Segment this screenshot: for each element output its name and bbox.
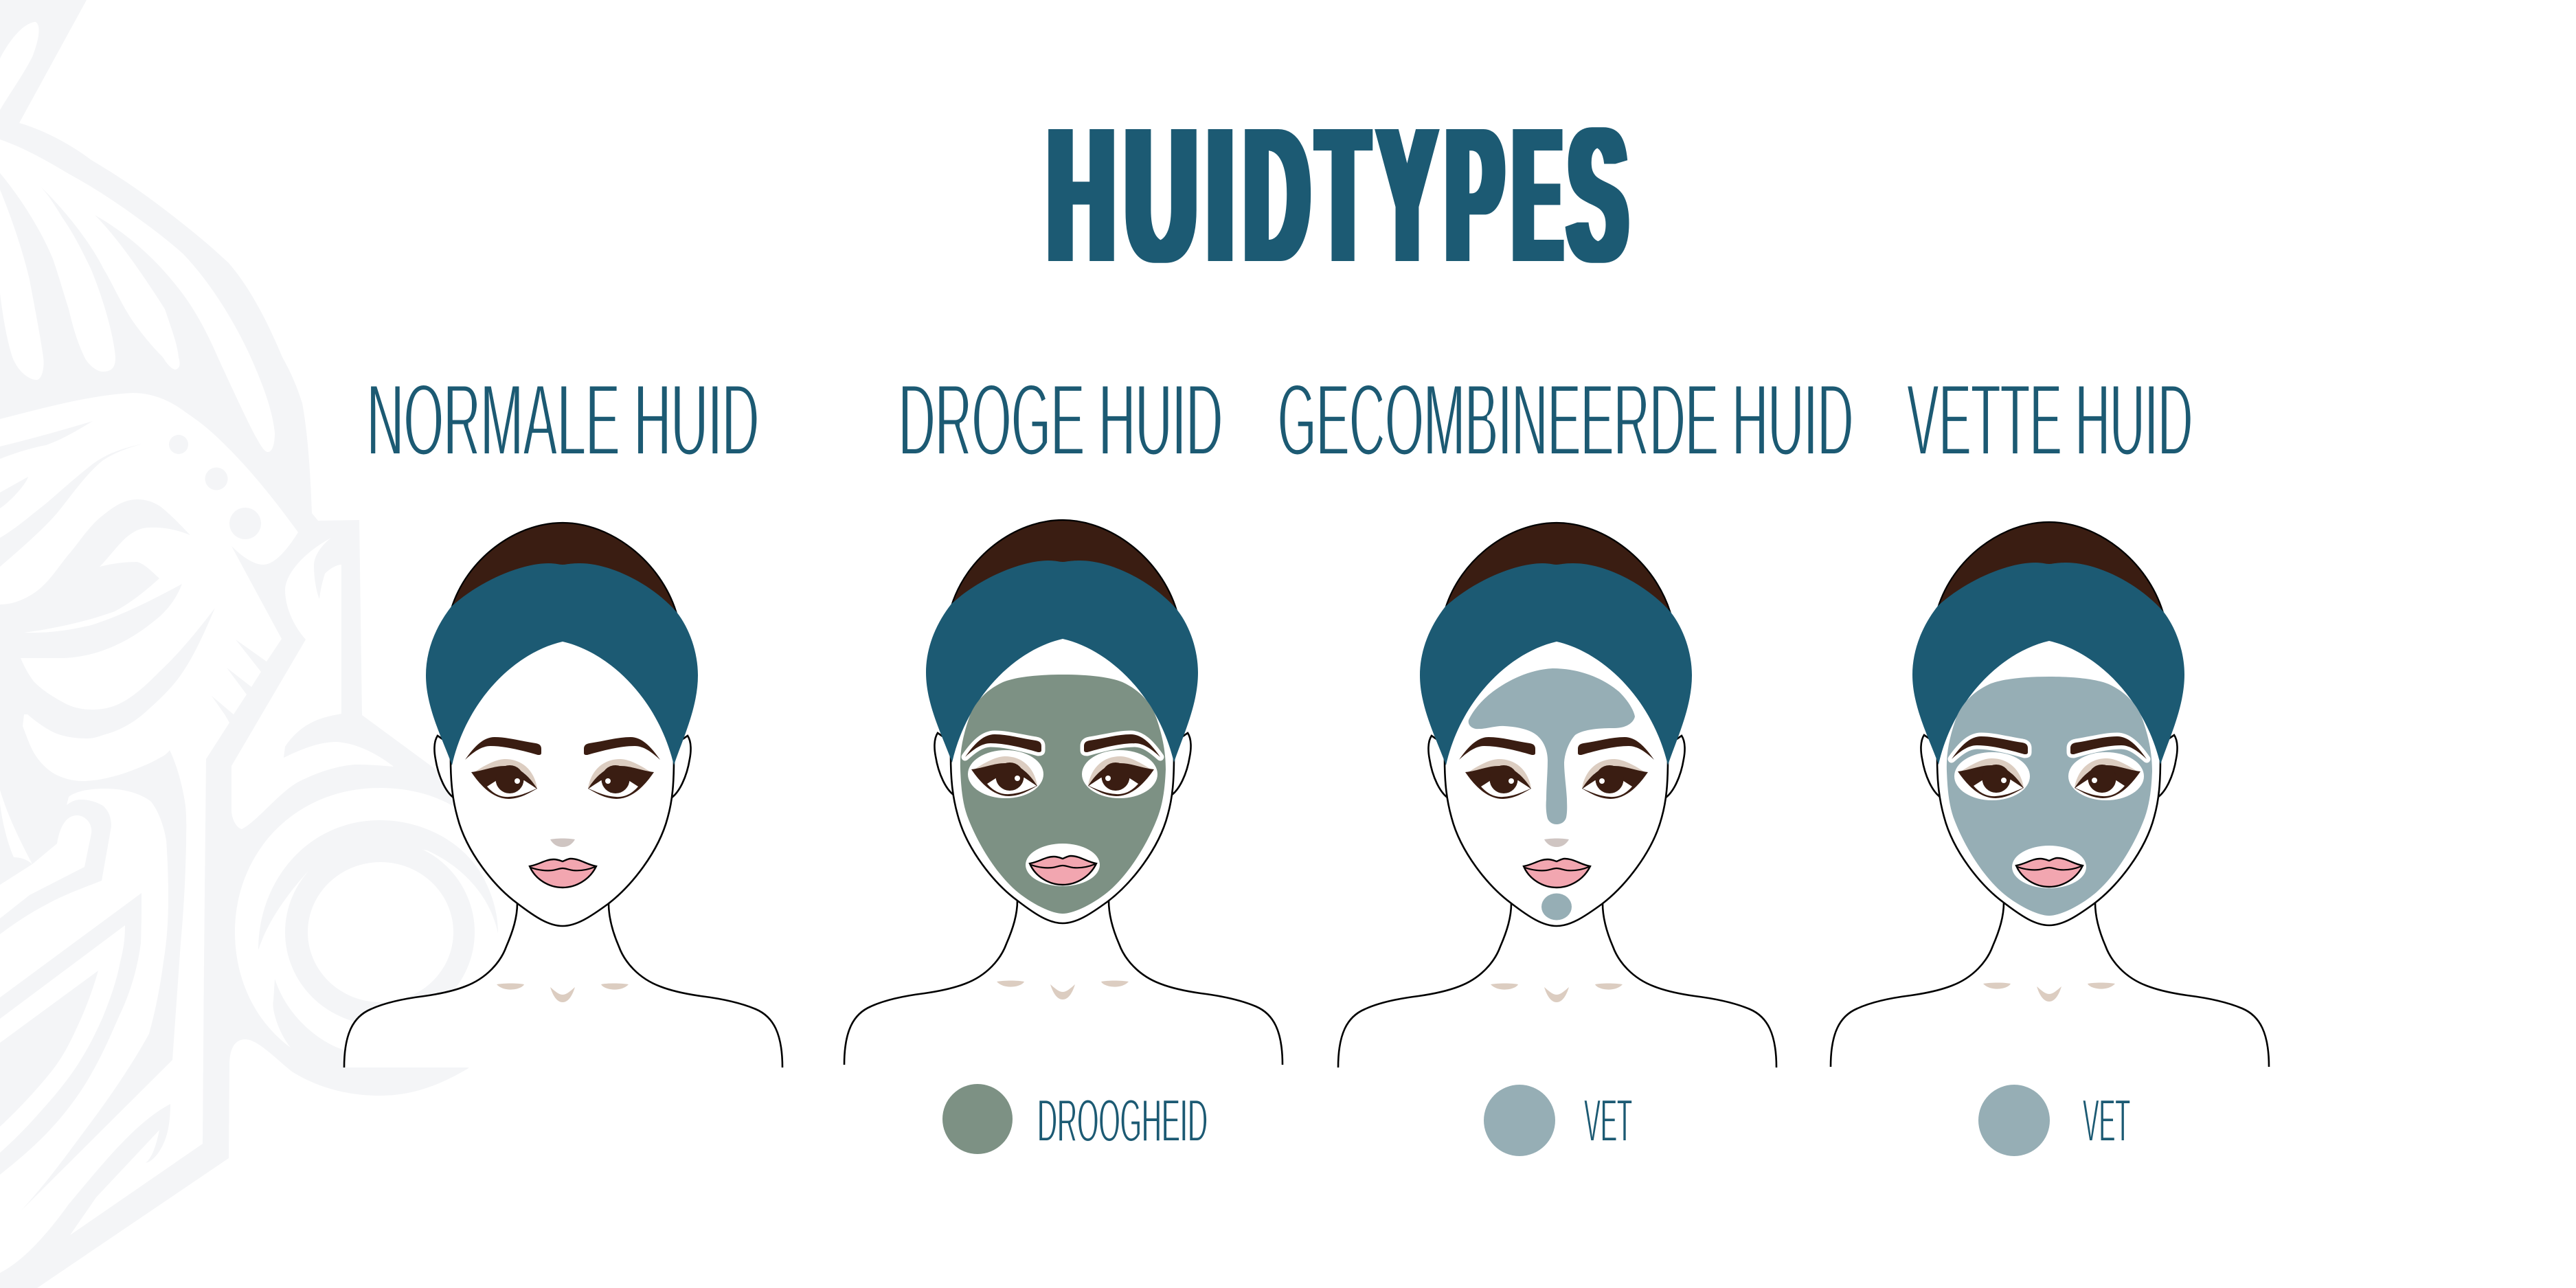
title: E: [1513, 87, 1561, 302]
text: VET: [1584, 1087, 1632, 1154]
title: P: [1446, 88, 1503, 302]
face: normale huid: [344, 523, 782, 1067]
title: D: [1245, 89, 1309, 302]
title: I: [1208, 87, 1233, 302]
title: T: [1318, 89, 1368, 302]
legend: droogheid: [942, 1084, 1208, 1154]
text: DROGE HUID: [899, 363, 1223, 477]
title: [1048, 87, 1627, 302]
legend: vet (gecombineerd): [1484, 1085, 1632, 1156]
title: U: [1125, 89, 1197, 302]
title: Y: [1379, 88, 1436, 302]
title: H: [1048, 89, 1115, 302]
text: VETTE HUID: [1907, 363, 2193, 477]
text: NORMALE HUID: [367, 363, 759, 477]
chin oil spot: [1541, 893, 1572, 920]
T-zone oil area: [1469, 668, 1635, 824]
background tribal lion pattern: [0, 0, 536, 1288]
face: vette huid with oil mask: [1831, 522, 2269, 1067]
title: S: [1568, 88, 1627, 302]
text: GECOMBINEERDE HUID: [1278, 363, 1853, 477]
text: VET: [2083, 1087, 2130, 1154]
face: droge huid with dryness mask: [844, 520, 1283, 1065]
face: gecombineerde huid with T-zone: [1338, 523, 1776, 1067]
text: DROOGHEID: [1037, 1087, 1208, 1154]
legend: vet (vette huid): [1978, 1085, 2130, 1156]
